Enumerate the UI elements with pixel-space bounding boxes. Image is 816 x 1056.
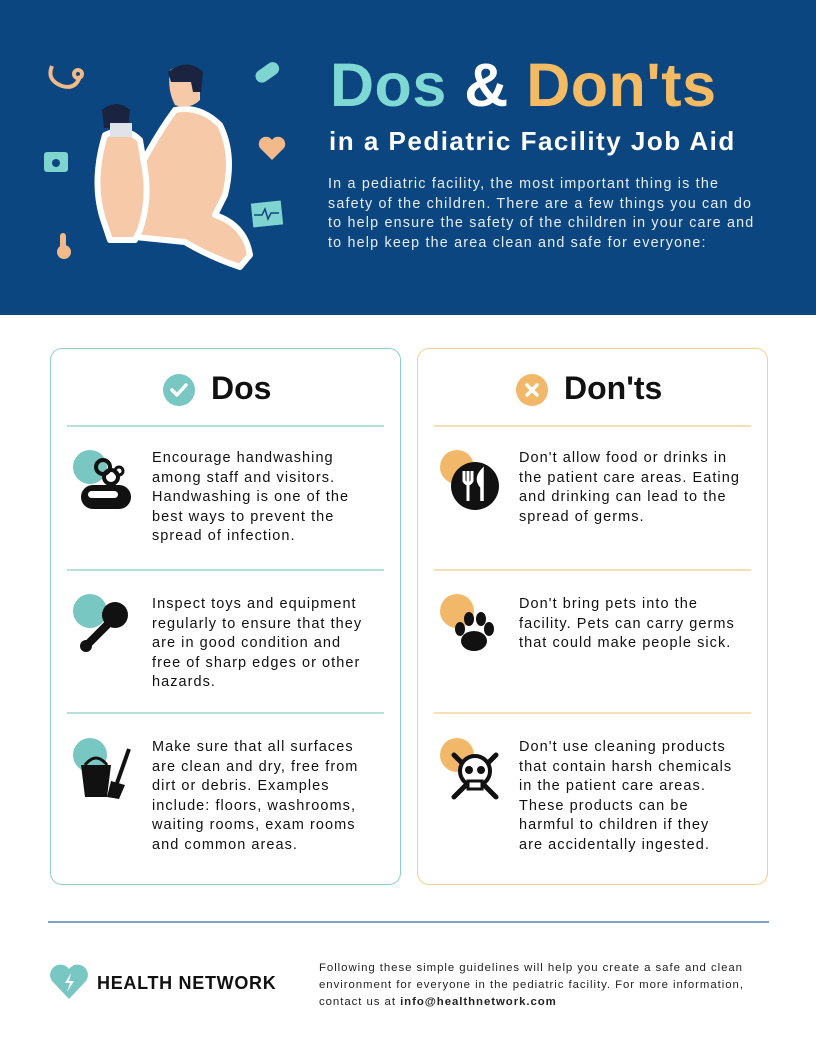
panel: donts	[417, 348, 768, 885]
icon: rattle	[73, 594, 128, 652]
icon: soap	[73, 450, 131, 509]
illustration: caregiver and child	[44, 62, 286, 270]
text: harsh chemicals	[519, 739, 732, 853]
intro paragraph: safety of the children. There are a few things you can do	[328, 196, 752, 212]
text: no food: the patient care areas. Eating	[519, 470, 740, 486]
text: inspect toys: regularly to ensure that they	[152, 616, 362, 632]
text: surfaces	[152, 739, 358, 853]
text: no pets	[519, 596, 735, 651]
text: no food: spread of germs.	[519, 509, 645, 525]
icon: bucket and broom	[73, 738, 131, 799]
icon: heart	[259, 137, 285, 160]
text: handwashing: Encourage handwashing	[152, 450, 334, 466]
icon: stethoscope	[50, 66, 82, 87]
panel: dos	[50, 348, 401, 885]
text: inspect toys: hazards.	[152, 674, 216, 690]
text: inspect toys: Inspect toys and equipment	[152, 596, 357, 612]
text: harsh chemicals: are accidentally ingested.	[519, 837, 710, 853]
text: surfaces: and common areas.	[152, 837, 298, 853]
footer logo	[50, 964, 276, 999]
icon: ecg	[251, 200, 283, 228]
text: harsh chemicals: Don't use cleaning products	[519, 739, 726, 755]
subtitle: in a Pediatric Facility Job Aid	[329, 126, 736, 156]
text: handwashing: among staff and visitors.	[152, 470, 335, 486]
icon: no food	[440, 450, 499, 510]
text: no food: and drinking can lead to the	[519, 489, 727, 505]
icon: thermometer	[57, 233, 71, 259]
text: inspect toys: are in good condition and	[152, 635, 341, 651]
icon: paw	[440, 594, 494, 651]
text: handwashing	[152, 450, 349, 544]
text: surfaces: include: floors, washrooms,	[152, 798, 356, 814]
text: no food	[519, 450, 740, 525]
intro paragraph	[328, 176, 754, 251]
footer text: contact us at info@healthnetwork.com	[319, 996, 557, 1008]
text: handwashing: Handwashing is one of the	[152, 489, 349, 505]
text: surfaces: dirt or debris. Examples	[152, 778, 330, 794]
text: surfaces: Make sure that all surfaces	[152, 739, 354, 755]
heading: dos	[163, 370, 271, 406]
header band	[0, 0, 816, 315]
footer logo: HEALTH NETWORK	[97, 973, 276, 993]
people	[98, 109, 250, 267]
text: surfaces: waiting rooms, exam rooms	[152, 817, 356, 833]
text: harsh chemicals: harmful to children if they	[519, 817, 709, 833]
intro paragraph: In a pediatric facility, the most important thing is the	[328, 176, 719, 192]
icon: medical bag	[44, 152, 68, 172]
text: handwashing: spread of infection.	[152, 528, 296, 544]
text: no pets: facility. Pets can carry germs	[519, 616, 735, 632]
text: harsh chemicals: that contain harsh chemicals	[519, 759, 732, 775]
heading: donts: Don'ts	[564, 370, 662, 406]
intro paragraph: to help keep the area clean and safe for everyone:	[328, 235, 707, 251]
heading: dos: Dos	[211, 370, 271, 406]
text: harsh chemicals: These products can be	[519, 798, 689, 814]
text: inspect toys: free of sharp edges or other	[152, 655, 360, 671]
text: surfaces: are clean and dry, free from	[152, 759, 358, 775]
footer text	[319, 962, 744, 1008]
text: no food: Don't allow food or drinks in	[519, 450, 727, 466]
title: Dos & Don'ts	[330, 51, 717, 119]
heading: donts	[516, 370, 662, 406]
text: handwashing: best ways to prevent the	[152, 509, 334, 525]
intro paragraph: to help ensure the safety of the children in your care and	[328, 215, 754, 231]
icon: skull	[440, 738, 498, 800]
text: no pets: Don't bring pets into the	[519, 596, 698, 612]
footer text: Following these simple guidelines will help you create a safe and clean	[319, 962, 743, 974]
footer text: environment for everyone in the pediatric facility. For more information,	[319, 979, 744, 991]
text: harsh chemicals: in the patient care areas.	[519, 778, 706, 794]
text: inspect toys	[152, 596, 362, 690]
text: no pets: that could make people sick.	[519, 635, 731, 651]
icon: pill	[253, 60, 282, 85]
